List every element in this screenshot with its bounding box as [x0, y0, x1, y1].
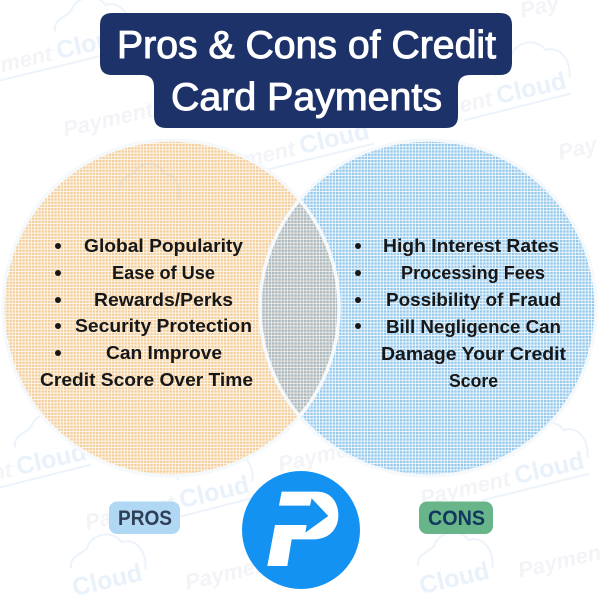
- cons label: CONS: [428, 507, 485, 530]
- watermark: Payment Cloud repeated logos: Payment: [183, 550, 279, 595]
- venn diagram: [3, 140, 596, 476]
- pros item 5 line 2: Credit Score Over Time: [40, 370, 253, 390]
- bullets: cons: [355, 243, 361, 329]
- watermark: Payment Cloud repeated logos: Payment: [418, 466, 514, 511]
- pros item 4: Security Protection: [75, 316, 252, 336]
- pros item 5 line 1: Can Improve: [106, 343, 222, 363]
- watermark: Payment Cloud repeated logos: Cloud: [297, 117, 372, 160]
- watermark: Payment Cloud repeated logos: Payment: [400, 86, 496, 131]
- icon: PaymentCloud P arrow logo: [242, 471, 360, 589]
- watermark: Payment Cloud repeated logos: Cloud: [494, 67, 569, 110]
- watermark: Payment Cloud repeated logos: Cloud: [177, 471, 252, 514]
- cons item 1: High Interest Rates: [383, 236, 559, 256]
- watermark: Payment Cloud repeated logos: Cloud: [417, 557, 492, 600]
- watermark: Payment Cloud repeated logos: Cloud: [14, 438, 89, 481]
- title banner: [100, 13, 512, 128]
- title line 2: Card Payments: [171, 76, 442, 119]
- watermark: Payment Cloud repeated logos: Payment: [276, 432, 372, 477]
- pros label: PROS: [118, 507, 172, 530]
- cons circle: [261, 141, 595, 475]
- cons item 4 line 2: Damage Your Credit: [381, 344, 566, 364]
- pros label: [109, 502, 180, 534]
- pros list: [40, 236, 253, 390]
- pros item 2: Ease of Use: [112, 263, 215, 283]
- watermark: Payment Cloud repeated logos: Cloud: [512, 447, 587, 490]
- pros item 1: Global Popularity: [84, 236, 243, 256]
- cons list: [355, 236, 566, 391]
- watermark: Payment Cloud repeated logos: Payment: [61, 97, 157, 142]
- watermark: Payment Cloud repeated logos: Payment: [83, 490, 179, 535]
- watermark: Payment Cloud repeated logos: Payment: [203, 136, 299, 181]
- watermark: Payment Cloud repeated logos: Pay: [556, 131, 600, 165]
- title line 1: Pros & Cons of Credit: [117, 24, 496, 67]
- pros circle: [4, 141, 338, 475]
- cons item 4 line 1: Bill Negligence Can: [386, 317, 561, 337]
- watermark: Payment Cloud repeated logos: Cloud: [54, 22, 129, 65]
- cons item 2: Processing Fees: [401, 263, 545, 283]
- cons label: [419, 502, 493, 534]
- pros item 3: Rewards/Perks: [94, 290, 233, 310]
- watermark inside pros circle: [120, 164, 179, 200]
- overlap lens: [262, 202, 338, 414]
- bullets: pros: [55, 243, 61, 356]
- lens outlines: [3, 140, 596, 476]
- banner shape: [100, 13, 512, 128]
- cons item 3: Possibility of Fraud: [386, 290, 561, 310]
- cons item 4 line 3: Score: [449, 371, 498, 391]
